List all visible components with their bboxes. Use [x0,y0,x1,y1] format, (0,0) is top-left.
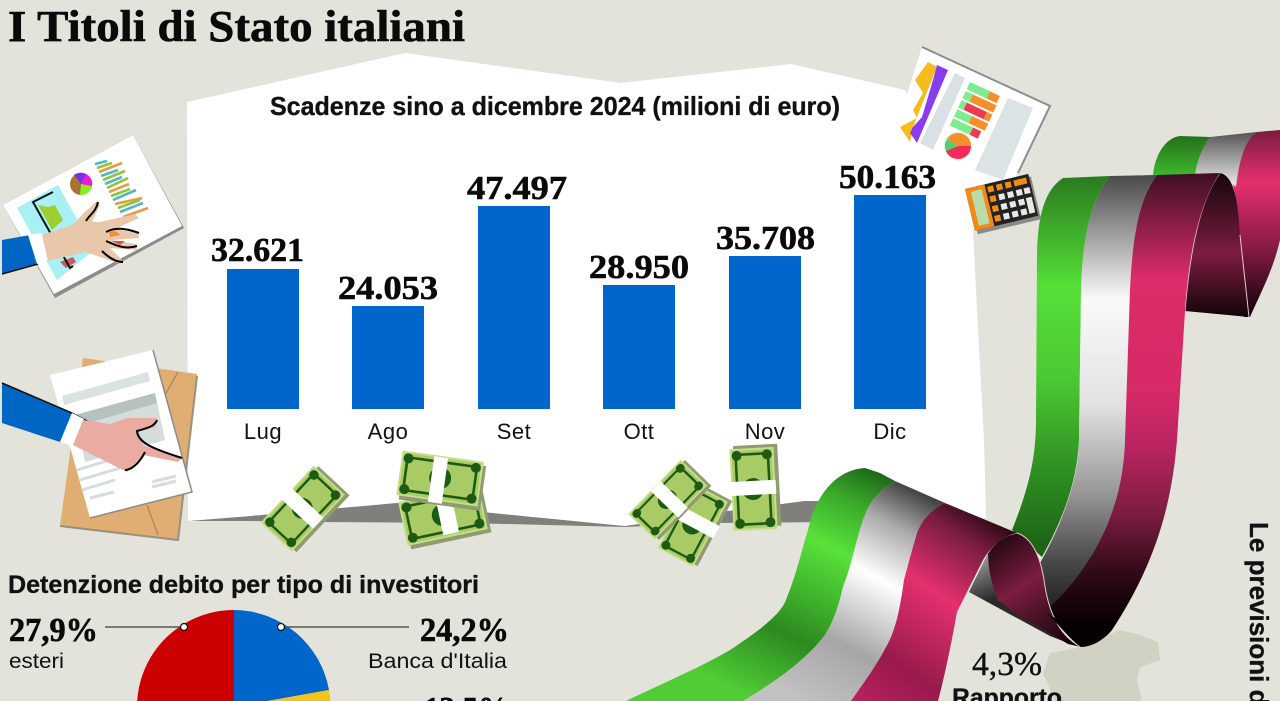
panel: maturities sheet [187,53,986,527]
bar chart: Ott [624,419,654,444]
bar chart: 35.708 [716,220,815,257]
ribbon tip over map [1045,612,1112,647]
sheet shadow [188,501,830,527]
bar chart: 32.621 [211,232,304,269]
label: foreign holders: 27,9% [9,612,98,649]
icon: cash bundle 4 [728,444,782,531]
bar chart: Lug [244,419,282,444]
title: I Titoli di Stato italiani [8,2,465,51]
label: foreign holders: esteri [9,650,64,673]
ribbon: rising band [1012,176,1110,557]
bar chart: 47.497 [467,170,567,207]
ribbon: far strip [1233,130,1280,317]
bar chart: 28.950 [589,249,689,286]
label: Bank of Italy: Banca d'Italia [368,650,507,673]
ribbon: Italian flag [626,130,1280,701]
icon: calculator [965,173,1041,235]
label: Bank of Italy: 24,2% [420,612,509,649]
bar chart [211,159,936,444]
label: foreign holders [9,612,98,673]
ribbon: front band [626,468,895,701]
sheet [187,53,986,526]
icon: folder, document and hand, left [2,350,197,540]
icon: cash bundle 2 [396,451,491,550]
label: Bank of Italy [368,612,509,673]
heading: investors: Detenzione debito per tipo di investitori [8,571,479,599]
forecast value: 4,3% [972,646,1042,683]
bar chart: Ago [368,419,408,444]
icon: document and hand, top left [2,135,184,298]
bar chart: 50.163 [839,159,936,196]
ribbon: lower fold underside [969,553,1068,643]
pie chart: debt holders [105,610,409,701]
icon: document with charts, top right [895,47,1050,232]
ribbon: inner loop [1185,173,1249,317]
bar chart: 24.053 [338,270,438,307]
icon: cash bundle 3 [628,458,732,569]
bar chart: Dic [873,419,907,444]
chart heading: Scadenze sino a dicembre 2024 (milioni di euro) [270,91,840,121]
icon: map of Italy [1043,630,1160,701]
icon: cash bundle 1 [260,463,350,554]
bar chart: Nov [745,419,785,444]
bar chart: Set [497,419,531,444]
